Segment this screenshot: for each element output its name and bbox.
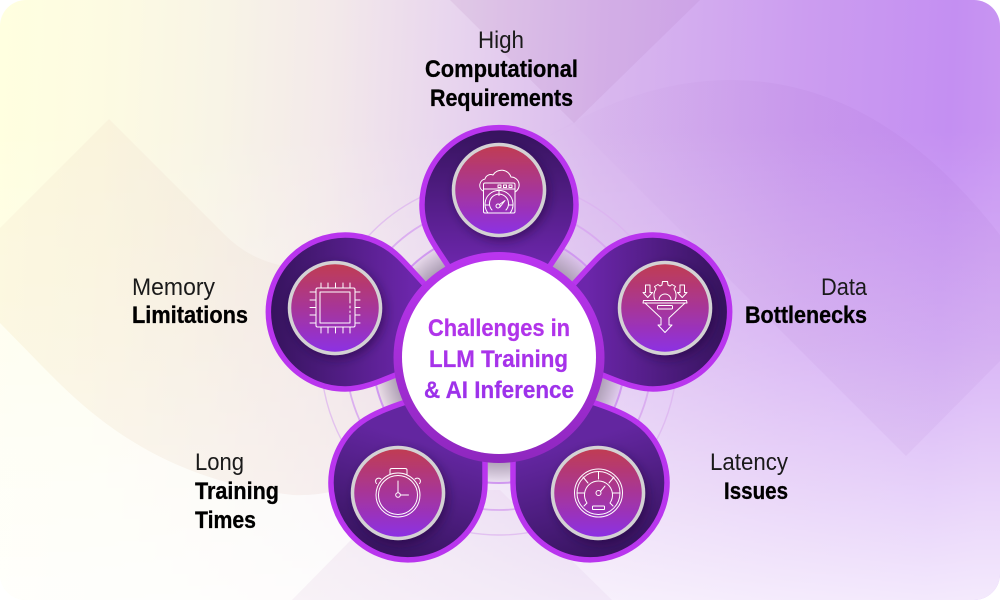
central hub [394, 252, 604, 463]
hub title: & AI Inference [424, 377, 574, 404]
label: memory limitations: Limitations [132, 302, 248, 329]
label: latency issues: Latency [710, 449, 788, 476]
hub title: LLM Training [429, 346, 568, 373]
label: data bottlenecks [745, 274, 868, 329]
hub title: Challenges in [428, 315, 570, 342]
hub title [424, 315, 574, 404]
icon: funnel [643, 282, 687, 332]
petal: memory limitations [268, 235, 428, 389]
label: long training times: Long [195, 449, 244, 476]
label: memory limitations: Memory [132, 274, 215, 301]
icon: stopwatch [376, 468, 420, 517]
concentric rings [321, 179, 677, 535]
label: latency issues: Issues [724, 478, 788, 505]
label: high computational requirements: High [478, 27, 524, 54]
label: high computational requirements: Computational [425, 56, 578, 83]
label: long training times: Training [195, 478, 279, 505]
label: long training times: Times [195, 507, 256, 534]
label: data bottlenecks: Data [821, 274, 868, 301]
label: high computational requirements: Requirements [430, 85, 573, 112]
label: memory limitations [132, 274, 248, 329]
petal: data bottlenecks [570, 235, 730, 389]
icon: chip [310, 283, 360, 333]
petal: latency issues [513, 402, 667, 560]
label: data bottlenecks: Bottlenecks [745, 302, 867, 329]
petal: high computational requirements [422, 128, 576, 272]
label: high computational requirements [425, 27, 578, 112]
label: long training times [195, 449, 279, 534]
icon: speedometer [574, 469, 622, 517]
petal: long training times [331, 402, 485, 560]
icon: cloud gauge [480, 170, 519, 213]
label: latency issues [710, 449, 788, 505]
